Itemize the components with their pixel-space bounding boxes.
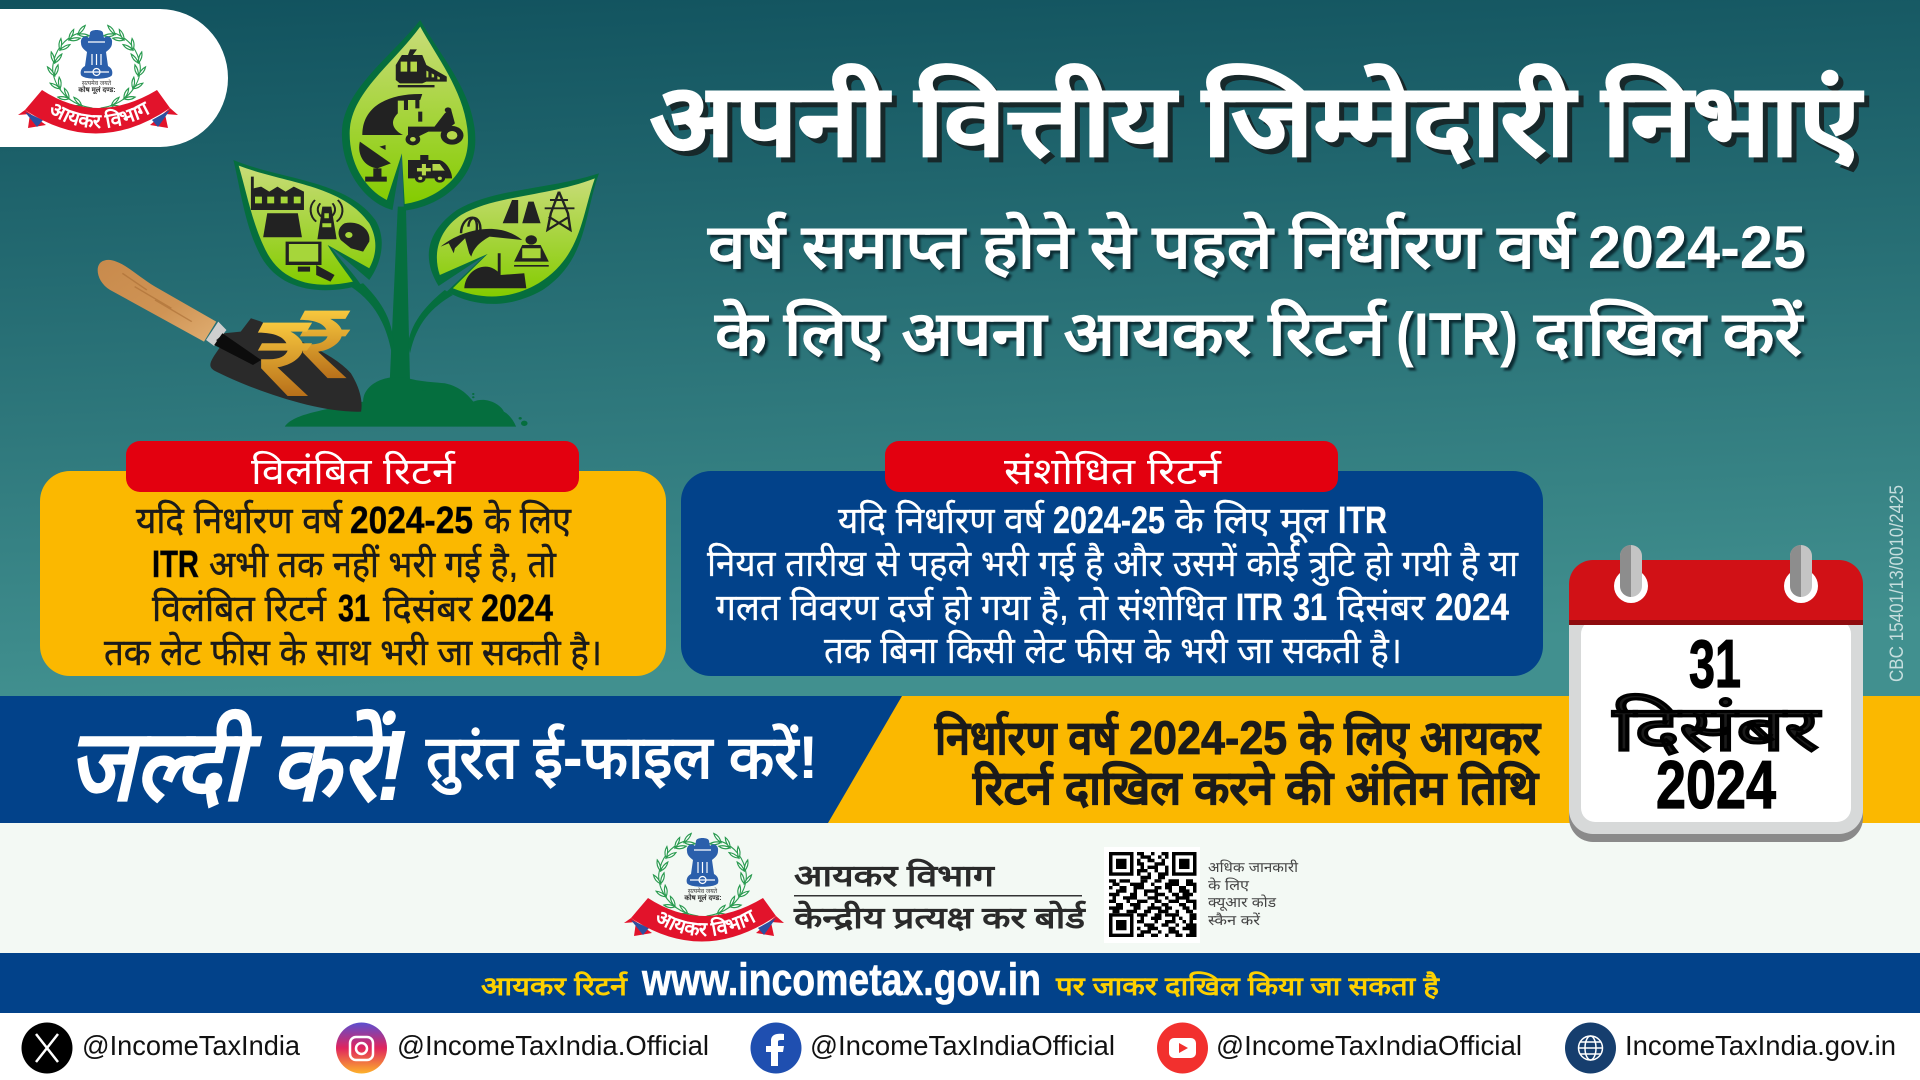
motto: सत्यमेव जयते <box>688 887 718 895</box>
footer logo <box>624 832 784 942</box>
revised return body text: 2024-25 <box>1053 500 1165 542</box>
logo pill: income tax department <box>0 9 228 147</box>
calendar date: 31 <box>1689 626 1741 702</box>
deadline text: रिटर्न दाखिल करने की अंतिम तिथि <box>972 761 1540 814</box>
CBC code: CBC 15401/13/0010/2425 <box>1887 485 1908 682</box>
QR caption: क्यूआर कोड <box>1208 894 1277 911</box>
subtitle: दाखिल करें <box>1533 298 1805 369</box>
late return body text: विलंबित रिटर्न <box>152 587 327 629</box>
motto: कोष मूलं दण्ड: <box>683 893 722 903</box>
hurry slogan: जल्दी करें! <box>67 708 407 822</box>
icons: bridge lab tower reader plant <box>441 200 549 288</box>
social: Facebook: @IncomeTaxIndiaOfficial <box>810 1030 1115 1061</box>
ribbon: आयकर विभाग <box>657 909 756 937</box>
department name <box>793 858 1086 935</box>
filing text right: पर जाकर दाखिल किया जा सकता है <box>1055 971 1440 1001</box>
late return body text: 2024 <box>481 588 553 630</box>
late return body text: 31 <box>338 588 370 630</box>
subtitle: 2024-25 <box>1588 214 1806 281</box>
icon details <box>401 62 457 180</box>
social bar <box>0 1013 1920 1080</box>
trowel <box>98 260 362 412</box>
subtitle <box>707 211 1806 369</box>
icons: train road tractor dish ambulance <box>359 49 463 183</box>
hurry band blue <box>0 696 902 823</box>
leaf: right <box>429 173 599 304</box>
subtitle: (ITR) <box>1396 301 1518 368</box>
late return body text <box>104 499 602 673</box>
calendar rings <box>1614 545 1818 603</box>
website url: www.incometax.gov.in <box>641 954 1041 1005</box>
illustration: plant with rupee trowel <box>98 20 599 427</box>
motto <box>77 79 116 95</box>
motto: सत्यमेव जयते <box>82 79 112 87</box>
revised return body text: 2024 <box>1435 587 1509 629</box>
calendar date: दिसंबर <box>1612 693 1823 764</box>
late return body text: अभी तक नहीं भरी गई है, तो <box>209 543 557 585</box>
revised return body text: तक बिना किसी लेट फीस के भरी जा सकती है। <box>824 629 1402 671</box>
branch: left <box>351 283 394 353</box>
tab: revised return heading <box>885 441 1338 492</box>
tab: late return heading: विलंबित रिटर्न <box>251 450 457 492</box>
revised return body text: यदि निर्धारण वर्ष <box>838 499 1045 541</box>
social: X: @IncomeTaxIndia <box>82 1030 300 1061</box>
social: X <box>22 1022 300 1074</box>
ribbon <box>18 90 178 134</box>
revised return body text: ITR <box>1338 500 1387 542</box>
social: YouTube: @IncomeTaxIndiaOfficial <box>1216 1030 1522 1061</box>
calendar date: 2024 <box>1656 747 1776 823</box>
deadline band yellow <box>0 696 1920 823</box>
social: website globe <box>1565 1022 1896 1074</box>
QR caption: के लिए <box>1208 877 1249 893</box>
emblem and wreath <box>47 25 146 111</box>
deadline text: निर्धारण वर्ष 2024-25 के लिए आयकर <box>934 711 1542 764</box>
emblem and wreath <box>653 833 752 919</box>
e-file slogan: तुरंत ई-फाइल करें! <box>425 723 818 796</box>
revised return body text: ITR <box>1236 587 1283 629</box>
social: website globe: IncomeTaxIndia.gov.in <box>1625 1030 1896 1061</box>
revised return body text: के लिए मूल <box>1175 499 1329 544</box>
filing text left: आयकर रिटर्न <box>481 971 629 1001</box>
QR code <box>1104 847 1200 943</box>
revised return body text: नियत तारीख से पहले भरी गई है और उसमें कोई त्रुटि हो गयी है या <box>707 542 1519 586</box>
panel: late return <box>40 441 666 676</box>
website band <box>0 953 1920 1013</box>
social: Instagram <box>336 1022 709 1074</box>
revised return body text: दिसंबर <box>1337 586 1426 628</box>
subtitle: वर्ष समाप्त होने से पहले निर्धारण वर्ष <box>707 211 1576 282</box>
late return body text: दिसंबर <box>383 587 473 629</box>
revised return body text: गलत विवरण दर्ज हो गया है, तो संशोधित <box>716 586 1227 628</box>
department name: केन्द्रीय प्रत्यक्ष कर बोर्ड <box>793 900 1086 935</box>
social: YouTube <box>1157 1022 1522 1074</box>
motto: कोष मूलं दण्ड: <box>77 85 116 95</box>
late return body text: तक लेट फीस के साथ भरी जा सकती है। <box>104 631 602 673</box>
subtitle: के लिए अपना आयकर रिटर्न <box>714 298 1388 369</box>
QR caption: स्कैन करें <box>1208 912 1260 928</box>
revised return body text <box>707 499 1519 671</box>
motto <box>683 887 722 903</box>
social: Facebook <box>750 1022 1115 1074</box>
tab: late return heading <box>126 441 579 492</box>
department name: आयकर विभाग <box>794 858 995 893</box>
late return body text: ITR <box>152 544 199 586</box>
panel: revised return <box>681 441 1543 676</box>
icon details <box>255 197 353 262</box>
icons: factory tower headset computer <box>251 177 369 282</box>
branch: right <box>408 290 453 353</box>
background <box>0 0 1920 696</box>
late return body text: 2024-25 <box>350 500 473 542</box>
QR caption: अधिक जानकारी <box>1208 859 1298 875</box>
revised return body text: 31 <box>1293 587 1327 629</box>
soil mound <box>285 377 528 427</box>
ribbon <box>624 898 784 942</box>
calendar date <box>1612 626 1823 823</box>
footer light band <box>0 823 1920 953</box>
QR caption <box>1208 859 1298 928</box>
tab: revised return heading: संशोधित रिटर्न <box>1004 450 1223 492</box>
title: अपनी वित्तीय जिम्मेदारी निभाएं <box>650 63 1864 177</box>
plant stem <box>390 207 410 383</box>
leaf: top <box>342 20 475 211</box>
late return body text: यदि निर्धारण वर्ष <box>136 499 343 541</box>
ribbon: आयकर विभाग <box>51 101 150 129</box>
calendar <box>1569 545 1863 842</box>
social: Instagram: @IncomeTaxIndia.Official <box>397 1030 709 1061</box>
deadline text <box>934 711 1542 814</box>
leaf: left <box>233 160 382 290</box>
late return body text: के लिए <box>484 499 572 541</box>
rupee symbols <box>258 311 350 396</box>
